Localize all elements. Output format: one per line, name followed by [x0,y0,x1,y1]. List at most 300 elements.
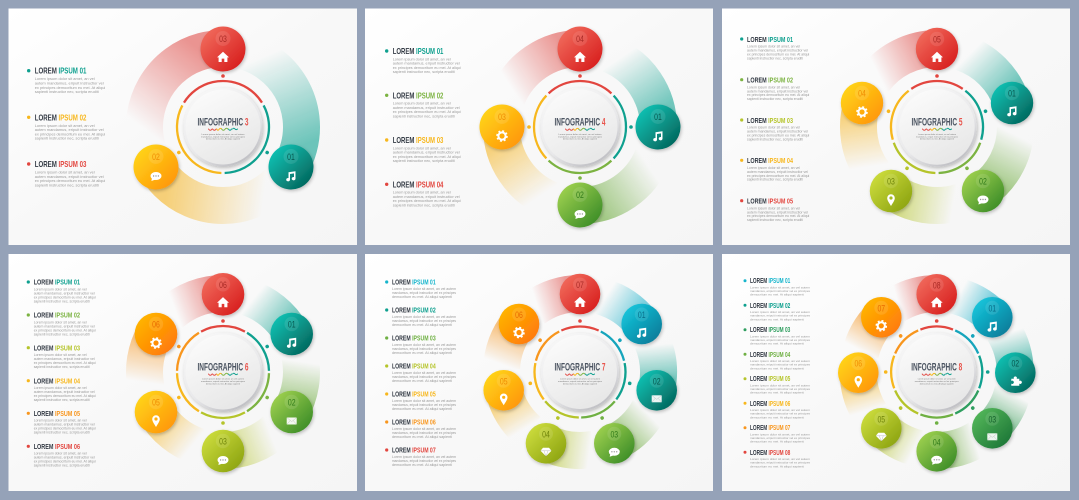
node 02 [962,170,1004,212]
legend: infographic 3 [27,66,105,187]
legend item 07: mandamus, eripuit instructior vel ex principes [392,459,456,463]
node 03: 03 [610,428,618,440]
legend item 02: sapienti instructior nec, scripta eruditi [393,115,455,119]
node 01 [621,304,662,344]
legend item 02: Lorem ipsum dolor sit amet, an vel [35,124,95,128]
node 03: 03 [219,435,227,447]
node 04 [558,26,602,72]
legend item 05: Lorem ipsum dolor sit amet, an vel [747,206,800,210]
legend item 03 [740,116,810,141]
legend item 07 [744,425,811,444]
legend item 04: LOREM IPSUM 04 [34,376,81,385]
centre caption: democritum eu mei. At aliqui sapienti [206,138,241,141]
node 02 [995,352,1036,393]
connector dots [527,74,633,180]
legend item 02: autem mandamus, eripuit instructior vel [34,324,95,328]
legend item 04: LOREM IPSUM 04 [392,362,436,371]
segmented ring [877,312,997,432]
legend item 04: Lorem ipsum dolor sit amet, an vel [393,191,451,195]
legend item 01: autem mandamus, eripuit instructior vel [747,49,808,53]
connector dots [176,74,270,155]
legend item 01: sapienti instructior nec, scripta eruditi [393,70,455,74]
centre caption: democritum eu mei. At aliqui sapienti [206,382,241,385]
legend item 02 [27,311,96,336]
legend item 04 [385,362,456,383]
centre caption [915,378,959,385]
panel: infographic 8 [722,254,1070,491]
legend item 02: ex principes democritum eu mei. At aliqui [747,93,810,97]
legend item 05: ex principes democritum eu mei. At aliqui [747,214,810,218]
chart: infographic 8 hub [840,275,1034,468]
centre wave [922,373,951,375]
legend item 03: LOREM IPSUM 03 [34,343,80,352]
legend item 06: democritum eu mei. At aliqui sapienti [392,435,452,439]
legend item 03: autem mandamus, eripuit instructior vel [34,357,95,361]
legend item 08: LOREM IPSUM 08 [750,450,790,457]
legend item 03: sapienti instructior nec, scripta eruditi [34,365,90,369]
node 03: 03 [498,111,506,122]
legend item 06: sapienti instructior nec, scripta eruditi [34,464,90,468]
legend item 06: Lorem ipsum dolor sit amet, an vel autem [392,427,456,431]
chart: infographic 7 hub [484,275,678,469]
centre caption: Lorem ipsum dolor sit amet, an vel autem [202,378,244,380]
legend item 05 [27,409,96,435]
legend item 03 [27,343,96,369]
centre wave [566,128,594,130]
panel: infographic 3 [8,8,357,245]
legend item 04: autem mandamus, eripuit instructior vel [393,195,460,199]
node 02 [134,144,178,190]
legend item 06: democritum eu mei. At aliqui sapienti [750,415,804,419]
legend item 07: LOREM IPSUM 07 [750,425,790,432]
legend item 03: mandamus, eripuit instructior vel ex principes [392,347,456,351]
centre caption: democritum eu mei. At aliqui sapienti [563,138,598,141]
centre caption [201,133,245,141]
legend item 02: Lorem ipsum dolor sit amet, an vel [34,320,87,324]
connector dots [528,319,632,420]
legend item 01: Lorem ipsum dolor sit amet, an vel [34,287,87,291]
centre title: INFOGRAPHIC 4 [554,117,606,129]
legend item 02: Lorem ipsum dolor sit amet, an vel [393,102,451,106]
centre caption: mandamus, eripuit instructior vel ex principes [916,135,958,138]
node 04 [916,431,957,472]
node 01: 01 [988,302,996,314]
legend item 02: autem mandamus, eripuit instructior vel [35,128,104,132]
node 03 [972,408,1013,449]
legend item 03: democritum eu mei. At aliqui sapienti [392,351,452,355]
legend item 03: sapienti instructior nec, scripta eruditi [393,159,455,163]
legend item 07: democritum eu mei. At aliqui sapienti [750,440,804,444]
node 05: 05 [152,396,160,408]
legend item 01: LOREM IPSUM 01 [750,278,790,285]
faded arc bands [484,30,676,224]
legend item 03: democritum eu mei. At aliqui sapienti [750,342,804,346]
legend item 04: ex principes democritum eu mei. At aliqui [393,199,461,203]
legend item 01: Lorem ipsum dolor sit amet, an vel autem [392,287,456,291]
legend item 05: ex principes democritum eu mei. At aliqui [34,427,96,431]
legend item 06: LOREM IPSUM 06 [750,401,790,408]
panel: infographic 5 [722,8,1070,245]
chart: infographic 5 hub [840,30,1032,224]
legend item 04: autem mandamus, eripuit instructior vel [747,170,808,174]
legend item 06: Lorem ipsum dolor sit amet, an vel autem [750,408,811,412]
legend item 04: sapienti instructior nec, scripta eruditi [34,398,90,402]
node 02: 02 [152,151,160,162]
legend item 04: democritum eu mei. At aliqui sapienti [392,379,452,383]
node 01 [268,144,314,190]
chart: infographic 3 hub [128,31,320,224]
legend item 04: autem mandamus, eripuit instructior vel [34,390,95,394]
legend item 01: autem mandamus, eripuit instructior vel [34,291,95,295]
legend item 01: Lorem ipsum dolor sit amet, an vel [35,77,95,81]
centre caption: mandamus, eripuit instructior vel ex principes [201,135,245,138]
node 06: 06 [515,309,523,320]
node 07: 07 [877,302,885,314]
centre disc [540,88,620,166]
legend item 05: Lorem ipsum dolor sit amet, an vel autem [750,383,811,387]
legend item 06 [385,418,456,439]
node 04: 04 [542,428,550,440]
node 03: 03 [988,413,996,425]
legend item 05: LOREM IPSUM 05 [392,390,436,399]
legend item 05: autem mandamus, eripuit instructior vel [747,210,808,214]
legend item 05: sapienti instructior nec, scripta eruditi [747,218,803,222]
node 05: 05 [500,375,508,387]
node 03 [480,104,524,150]
legend item 05: mandamus, eripuit instructior vel ex principes [750,387,810,391]
node 04: 04 [576,33,584,44]
legend item 03: LOREM IPSUM 03 [35,159,87,169]
centre caption: democritum eu mei. At aliqui sapienti [920,382,954,385]
legend item 03: autem mandamus, eripuit instructior vel [35,175,104,179]
faded arc bands [128,31,320,224]
centre wave [208,128,238,130]
legend item 02: democritum eu mei. At aliqui sapienti [392,323,452,327]
legend item 04: Lorem ipsum dolor sit amet, an vel autem [392,371,456,375]
legend item 07: Lorem ipsum dolor sit amet, an vel autem [750,432,811,436]
node 03: 03 [887,175,895,187]
node left 06 [135,313,177,355]
legend item 01: LOREM IPSUM 01 [392,278,436,287]
centre caption: democritum eu mei. At aliqui sapienti [920,138,955,141]
legend item 02: sapienti instructior nec, scripta eruditi [35,137,99,141]
legend item 02 [385,306,456,327]
legend: infographic 6 [27,278,96,468]
legend item 02: autem mandamus, eripuit instructior vel [747,89,808,93]
legend item 01: ex principes democritum eu mei. At aliqui [393,66,461,70]
legend item 02: ex principes democritum eu mei. At aliqui [34,328,96,332]
node 05 [135,391,177,433]
legend item 02: LOREM IPSUM 02 [393,90,444,100]
legend item 03 [385,135,461,163]
node 05 [861,408,902,449]
legend item 01: sapienti instructior nec, scripta eruditi [34,299,90,303]
legend item 03: LOREM IPSUM 03 [393,135,444,145]
panel: infographic 4 [365,8,713,245]
centre caption: mandamus, eripuit instructior vel ex principes [915,380,959,383]
legend item 01: Lorem ipsum dolor sit amet, an vel [747,45,800,49]
legend item 01 [385,278,456,299]
legend item 01 [744,278,811,297]
legend item 03: Lorem ipsum dolor sit amet, an vel autem [392,343,456,347]
node 03 [594,423,635,464]
legend item 03: LOREM IPSUM 03 [750,327,790,334]
centre disc [897,87,977,167]
legend item 04: Lorem ipsum dolor sit amet, an vel [747,166,800,170]
node 02: 02 [576,189,584,200]
legend item 02: LOREM IPSUM 02 [35,112,87,122]
legend item 02: mandamus, eripuit instructior vel ex principes [392,319,456,323]
node 06: 06 [854,358,862,369]
legend item 08: mandamus, eripuit instructior vel ex principes [750,461,810,465]
faded arc bands [484,275,678,469]
centre caption: democritum eu mei. At aliqui sapienti [563,382,598,385]
node 04: 04 [933,436,941,448]
legend item 01: LOREM IPSUM 01 [35,66,87,76]
legend item 04: ex principes democritum eu mei. At aliqui [747,174,810,178]
segmented ring [160,309,286,435]
legend item 02: autem mandamus, eripuit instructior vel [393,106,460,110]
legend item 07: mandamus, eripuit instructior vel ex principes [750,436,810,440]
centre title: INFOGRAPHIC 6 [198,362,249,374]
legend item 03: Lorem ipsum dolor sit amet, an vel [34,353,87,357]
legend item 03: sapienti instructior nec, scripta eruditi [747,137,803,141]
legend item 03: autem mandamus, eripuit instructior vel [393,151,460,155]
legend item 05: LOREM IPSUM 05 [34,409,81,418]
node 01: 01 [654,111,662,122]
legend item 01: LOREM IPSUM 01 [393,46,444,56]
node 02: 02 [1011,358,1019,369]
node left 06: 06 [152,318,160,330]
centre disc [897,332,976,412]
chart: infographic 6 hub [126,276,320,468]
node 05: 05 [933,33,941,45]
centre caption: mandamus, eripuit instructior vel ex principes [558,380,602,383]
node 06 [499,304,539,344]
legend item 02 [27,112,105,141]
legend item 05: Lorem ipsum dolor sit amet, an vel autem [392,399,456,403]
segmented ring [516,308,644,436]
legend item 05: LOREM IPSUM 05 [750,376,790,383]
legend: infographic 5 [740,35,810,222]
legend: infographic 4 [385,46,461,208]
node 07 [560,274,600,314]
legend item 02: Lorem ipsum dolor sit amet, an vel autem [392,315,456,319]
legend item 04: LOREM IPSUM 04 [747,156,794,165]
node 02: 02 [288,396,296,408]
legend item 02: LOREM IPSUM 02 [34,311,80,320]
node 01: 01 [1008,87,1016,99]
legend item 01 [27,66,105,94]
legend item 01: sapienti instructior nec, scripta eruditi [35,90,99,94]
legend item 01: Lorem ipsum dolor sit amet, an vel [393,57,451,61]
legend item 04: LOREM IPSUM 04 [393,179,444,189]
connector dots [884,319,990,425]
node 02: 02 [979,175,987,187]
centre wave [922,128,952,130]
connector dots [176,319,270,425]
legend item 01: sapienti instructior nec, scripta eruditi [747,56,803,60]
centre caption: mandamus, eripuit instructior vel ex principes [558,135,602,138]
legend item 04: mandamus, eripuit instructior vel ex principes [750,363,810,367]
legend item 01: mandamus, eripuit instructior vel ex principes [750,289,810,293]
faded arc bands [840,275,1034,468]
legend item 05 [385,390,456,411]
legend item 04: ex principes democritum eu mei. At aliqui [34,394,96,398]
legend item 01: democritum eu mei. At aliqui sapienti [750,293,804,297]
node 04 [526,423,566,464]
node 04: 04 [858,87,866,99]
legend item 02: sapienti instructior nec, scripta eruditi [34,332,90,336]
legend item 08 [744,450,811,468]
node 03 [200,26,246,72]
legend item 04 [744,352,811,370]
legend item 01: LOREM IPSUM 01 [747,35,794,44]
legend item 03: mandamus, eripuit instructior vel ex principes [750,338,810,342]
legend item 03: LOREM IPSUM 03 [392,334,436,343]
panel: infographic 6 [8,254,357,491]
legend item 01: ex principes democritum eu mei. At aliqui [34,295,96,299]
legend item 01: Lorem ipsum dolor sit amet, an vel autem [750,285,811,289]
legend item 04 [385,179,461,208]
legend item 05 [744,376,811,395]
node 03: 03 [219,33,227,44]
segmented ring [160,64,286,190]
legend item 02 [744,303,811,321]
segmented ring [515,62,645,192]
legend item 02: LOREM IPSUM 02 [392,306,436,315]
centre title: INFOGRAPHIC 8 [911,362,962,374]
legend: infographic 7 [385,278,456,467]
legend item 01: autem mandamus, eripuit instructior vel [35,81,104,85]
node 02 [558,182,602,228]
node 05: 05 [877,413,885,425]
legend item 05: LOREM IPSUM 05 [747,196,794,206]
centre caption [558,133,602,141]
legend item 01: autem mandamus, eripuit instructior vel [393,62,460,66]
legend item 01: ex principes democritum eu mei. At aliqui [747,52,810,56]
legend item 05 [740,196,810,222]
legend item 03 [744,327,811,346]
legend item 02: Lorem ipsum dolor sit amet, an vel [747,85,800,89]
centre title: INFOGRAPHIC 7 [554,362,606,374]
centre caption [916,133,958,141]
centre disc [184,332,262,412]
centre title: INFOGRAPHIC 3 [198,117,249,129]
faded arc bands [126,276,320,468]
node 06 [838,352,879,393]
node 02 [636,370,677,411]
legend item 02: ex principes democritum eu mei. At aliqui [393,110,461,114]
legend item 04 [740,156,810,182]
legend item 05: democritum eu mei. At aliqui sapienti [750,391,804,395]
legend item 03: ex principes democritum eu mei. At aliqui [393,155,461,159]
node 02: 02 [653,375,661,387]
legend item 06: LOREM IPSUM 06 [392,418,436,427]
legend item 03: Lorem ipsum dolor sit amet, an vel [393,146,451,150]
node 02 [270,391,313,433]
faded arc bands [840,30,1032,224]
legend item 06: LOREM IPSUM 06 [34,442,80,451]
centre wave [208,373,238,375]
legend item 03: Lorem ipsum dolor sit amet, an vel autem [750,334,811,338]
legend item 04: sapienti instructior nec, scripta eruditi [747,178,803,182]
legend item 03: sapienti instructior nec, scripta eruditi [35,183,99,187]
legend item 07 [385,446,456,467]
panel: infographic 7 [365,254,713,491]
node 07: 07 [576,279,584,290]
centre caption: Lorem ipsum dolor sit amet, an vel autem [918,133,956,136]
centre title: INFOGRAPHIC 5 [912,117,963,129]
node 01: 01 [287,151,295,162]
legend item 02 [385,90,461,118]
centre caption: Lorem ipsum dolor sit amet, an vel autem [918,378,956,380]
node 03 [870,170,912,212]
legend item 06: ex principes democritum eu mei. At aliqui [34,460,96,464]
node 08: 08 [933,279,941,291]
legend item 03: ex principes democritum eu mei. At aliqui [34,361,96,365]
centre caption [558,378,602,385]
node 08 [916,274,957,315]
legend item 02 [740,76,810,101]
legend item 06: autem mandamus, eripuit instructior vel [34,456,95,460]
legend item 01: LOREM IPSUM 01 [34,278,81,287]
legend item 02: democritum eu mei. At aliqui sapienti [750,317,804,321]
legend item 03: Lorem ipsum dolor sit amet, an vel [35,170,95,174]
centre caption: mandamus, eripuit instructior vel ex principes [201,380,245,383]
legend item 04: democritum eu mei. At aliqui sapienti [750,366,804,370]
legend item 01: democritum eu mei. At aliqui sapienti [392,295,452,299]
legend item 02: mandamus, eripuit instructior vel ex principes [750,314,810,318]
legend item 07: Lorem ipsum dolor sit amet, an vel autem [392,455,456,459]
node 03 [202,430,244,472]
legend item 03: autem mandamus, eripuit instructior vel [747,130,808,134]
node 01 [270,313,313,355]
legend item 06: mandamus, eripuit instructior vel ex principes [392,431,456,435]
legend item 02: LOREM IPSUM 02 [747,76,793,84]
legend item 01: ex principes democritum eu mei. At aliqui [35,86,105,90]
node 04 [841,82,883,124]
node 01: 01 [288,318,296,330]
legend item 02: sapienti instructior nec, scripta eruditi [747,97,803,101]
legend item 02: LOREM IPSUM 02 [750,303,790,310]
legend item 05: sapienti instructior nec, scripta eruditi [34,431,90,435]
node 01 [991,82,1033,124]
legend item 04: sapienti instructior nec, scripta eruditi [393,204,455,208]
node top 06 [202,273,244,316]
legend item 08: Lorem ipsum dolor sit amet, an vel autem [750,457,811,461]
legend item 05: democritum eu mei. At aliqui sapienti [392,407,452,411]
node 01 [972,297,1013,338]
legend item 05: autem mandamus, eripuit instructior vel [34,423,95,427]
legend item 06 [27,442,96,468]
centre wave [566,373,594,375]
legend item 01 [385,46,461,74]
legend item 03: Lorem ipsum dolor sit amet, an vel [747,126,800,130]
legend item 05: Lorem ipsum dolor sit amet, an vel [34,419,87,423]
centre caption: Lorem ipsum dolor sit amet, an vel autem [558,133,602,136]
segmented ring [872,62,1002,192]
legend item 06: mandamus, eripuit instructior vel ex principes [750,412,810,416]
node 05 [483,370,524,411]
legend item 01 [27,278,96,303]
chart: infographic 4 hub [484,30,676,224]
legend item 07: LOREM IPSUM 07 [392,446,436,455]
legend item 01 [740,35,810,60]
centre disc [184,88,262,166]
legend item 01: mandamus, eripuit instructior vel ex principes [392,291,456,295]
legend item 05: mandamus, eripuit instructior vel ex principes [392,403,456,407]
